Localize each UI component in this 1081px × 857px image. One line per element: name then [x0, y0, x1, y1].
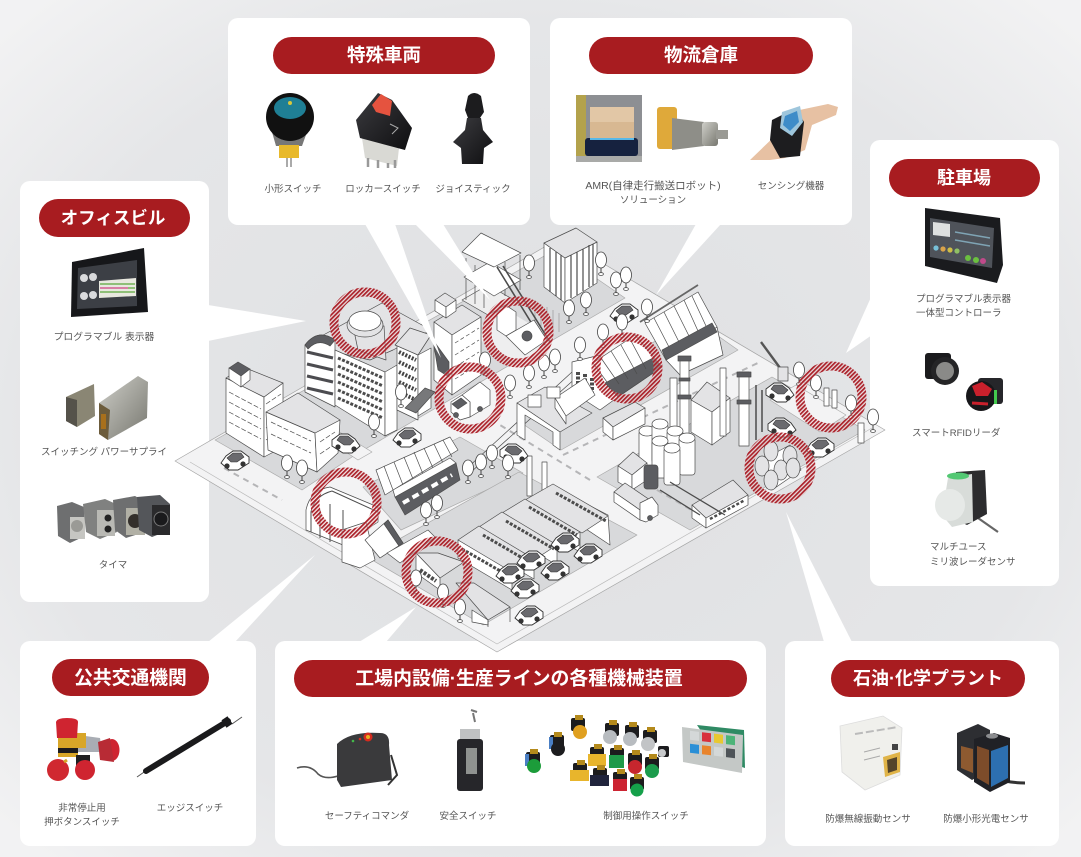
icon: timers	[57, 495, 170, 543]
heading: parking: 駐車場	[937, 168, 991, 188]
parking gate	[761, 342, 788, 381]
label: switching power supply: スイッチング パワーサプライ	[41, 446, 167, 458]
icon: AMR photo	[576, 95, 642, 162]
icon: joystick	[453, 93, 493, 164]
heading: office building	[39, 199, 190, 237]
icon: photoelectric sensor	[957, 724, 1025, 792]
trailer	[603, 402, 645, 440]
truck	[451, 382, 490, 420]
small factory building	[416, 553, 464, 590]
icon: millimeter wave radar sensor	[935, 470, 998, 532]
icon: motor	[657, 107, 728, 150]
icon: rocker switch	[356, 93, 412, 168]
icon: safety switch	[457, 710, 483, 791]
label: rocker switch: ロッカースイッチ	[345, 184, 421, 195]
heading: logistics warehouse: 物流倉庫	[664, 44, 738, 66]
city blocks	[215, 250, 865, 625]
bus	[387, 530, 435, 563]
heading: special vehicles	[273, 37, 495, 74]
label: sensing device: センシング機器	[758, 180, 825, 192]
loading building with trailer	[517, 378, 595, 450]
label: safety commander: セーフティコマンダ	[325, 810, 410, 822]
heading: public transport: 公共交通機関	[74, 667, 187, 688]
icon: switch panel	[682, 725, 745, 773]
panel: special vehicles	[228, 18, 530, 225]
icon: RFID readers	[925, 353, 1003, 411]
label: wireless vibration sensor: 防爆無線振動センサ	[825, 813, 911, 825]
icon: power supply	[66, 376, 148, 440]
highlight circles	[315, 292, 862, 603]
label: safety switch: 安全スイッチ	[439, 810, 497, 822]
heading: logistics warehouse	[589, 37, 813, 74]
panel: parking	[870, 140, 1059, 586]
panel: oil and chemical plant	[785, 641, 1059, 846]
panel: office building	[20, 181, 209, 602]
heading: special vehicles: 特殊車両	[347, 44, 421, 66]
building: tall rear	[535, 228, 597, 332]
label: edge switch: エッジスイッチ	[157, 803, 223, 814]
heading: parking	[889, 159, 1040, 197]
isometric city map	[175, 228, 885, 652]
heading: public transport	[52, 659, 209, 696]
trees	[282, 252, 878, 622]
building: round office tower	[305, 303, 431, 436]
EV chargers	[824, 388, 864, 443]
station arch	[306, 487, 378, 545]
label: smart RFID reader: スマートRFIDリーダ	[912, 427, 1001, 439]
label: millimeter wave radar sensor: ミリ波レーダセンサ	[930, 556, 1016, 568]
building: tower with roof box	[433, 293, 481, 395]
heading: factory equipment: 工場内設備·生産ラインの各種機械装置	[355, 666, 683, 690]
label: programmable display: プログラマブル表示器	[916, 293, 1012, 305]
label: control switches: 制御用操作スイッチ	[603, 810, 689, 822]
delivery truck	[614, 483, 658, 522]
crane truck	[497, 266, 550, 355]
silver tanks	[755, 441, 801, 490]
label: solution: ソリューション	[620, 195, 686, 206]
label: integrated controller: 一体型コントローラ	[916, 307, 1002, 319]
plant stacks and tanks	[618, 356, 762, 528]
factory sawtooth roofs	[458, 456, 610, 590]
icon: programmable display	[71, 248, 148, 317]
heading: factory equipment	[294, 660, 747, 697]
building: apartment	[266, 393, 340, 472]
panel: factory equipment	[275, 641, 766, 846]
heading: oil and chemical plant: 石油·化学プラント	[853, 668, 1003, 688]
icon: control switches group	[525, 715, 669, 796]
icon: small switch	[266, 93, 314, 167]
icon: safety commander	[297, 732, 397, 787]
label: photoelectric sensor: 防爆小形光電センサ	[943, 813, 1029, 825]
heading: office building: オフィスビル	[61, 208, 165, 228]
shed	[456, 583, 510, 627]
triangle hall	[342, 520, 403, 568]
label: programmable display: プログラマブル 表示器	[54, 330, 155, 343]
escalator	[405, 388, 435, 413]
panel: public transport	[20, 641, 256, 846]
icon: emergency stop switches	[47, 718, 120, 781]
label: push button switch: 押ボタンスイッチ	[44, 816, 120, 828]
icon: wrist device	[750, 104, 838, 160]
panel: logistics warehouse	[550, 18, 852, 225]
building: low-rise left	[226, 362, 283, 457]
label: emergency stop: 非常停止用	[58, 802, 106, 814]
building: striped tower	[395, 328, 431, 420]
label: joystick: ジョイスティック	[435, 184, 511, 195]
icon: integrated controller display	[925, 208, 1003, 283]
ground plate	[175, 238, 885, 652]
building: under construction	[462, 233, 521, 315]
heading: oil and chemical plant	[831, 660, 1025, 697]
icon: edge switch	[137, 717, 242, 777]
label: timer: タイマ	[99, 560, 127, 571]
label: multi-use: マルチユース	[930, 542, 987, 553]
plate edge line	[190, 428, 872, 644]
warehouse roofs	[572, 285, 723, 410]
label: AMR: AMR(自律走行搬送ロボット)	[585, 179, 721, 192]
icon: wireless vibration sensor	[840, 716, 902, 790]
callout pointers	[208, 224, 872, 642]
road dashes	[224, 362, 760, 515]
label: small switch: 小形スイッチ	[264, 183, 322, 195]
cars	[221, 304, 834, 625]
rail line	[465, 372, 578, 472]
train and arcade	[376, 437, 460, 515]
